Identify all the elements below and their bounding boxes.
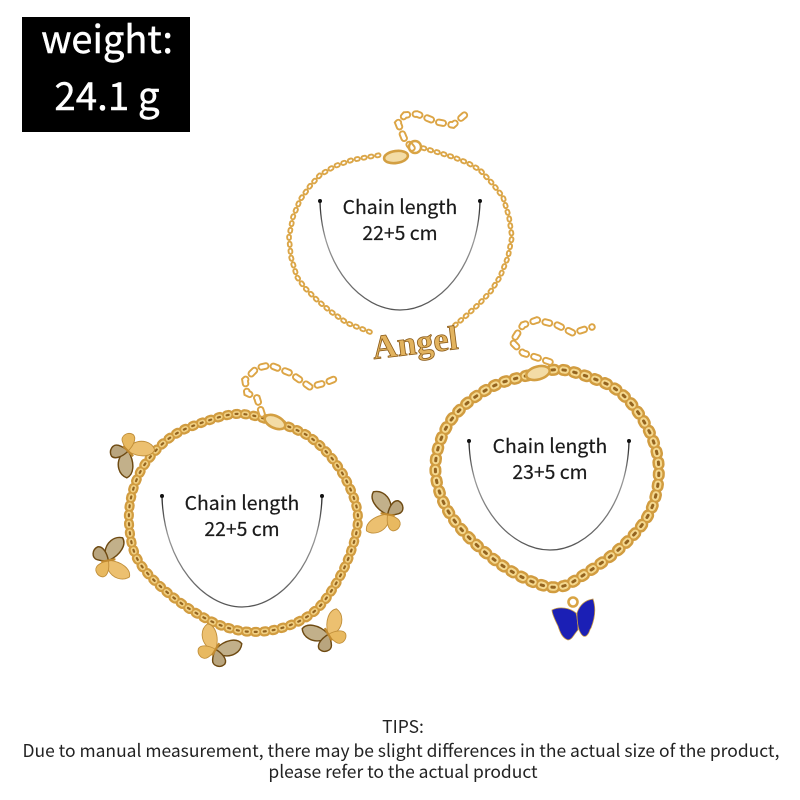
measurement arc: butterfly chain	[160, 494, 324, 607]
weight label: weight:	[41, 9, 173, 64]
tips note: please refer to the actual product	[268, 759, 538, 784]
tips note	[23, 714, 779, 784]
extender chain	[398, 112, 468, 148]
weight label: 24.1 g	[54, 66, 160, 122]
lobster clasp	[383, 141, 421, 165]
weight label	[22, 9, 190, 132]
chain length label: thin chain: Chain length	[343, 191, 457, 220]
Angel nameplate: Angel	[370, 320, 460, 367]
chain length label: blue butterfly chain	[493, 430, 607, 485]
chain length label: butterfly chain: 22+5 cm	[204, 513, 280, 542]
extender chain	[245, 365, 337, 414]
tips note: Due to manual measurement, there may be slight differences in the actual size of the product,	[23, 738, 779, 763]
chain length label: butterfly chain: Chain length	[185, 487, 299, 516]
blue butterfly charm	[552, 598, 595, 640]
bracelet: thin chain with Angel nameplate	[289, 112, 512, 367]
butterfly charm: upper left	[103, 426, 156, 479]
butterfly charm: left	[91, 537, 130, 584]
tips note: TIPS:	[382, 714, 424, 739]
butterfly charm: bottom right	[301, 608, 353, 657]
thin chain	[289, 148, 512, 332]
chain length label: butterfly chain	[185, 487, 299, 542]
bracelet: curb chain with gold butterflies	[129, 365, 358, 632]
extender chain	[512, 320, 592, 362]
bracelet: wide curb chain with blue butterfly	[435, 320, 659, 587]
butterfly charm: right	[366, 491, 405, 538]
curb chain	[435, 370, 659, 587]
lobster clasp	[262, 412, 288, 432]
curb chain	[129, 414, 358, 632]
chain length label: blue butterfly chain: 23+5 cm	[512, 456, 588, 485]
measurement arc: thin chain	[318, 199, 482, 310]
chain length label: thin chain	[343, 191, 457, 246]
chain length label: blue butterfly chain: Chain length	[493, 430, 607, 459]
measurement arc: blue butterfly chain	[467, 439, 631, 550]
butterfly charm: bottom left	[191, 623, 243, 672]
chain length label: thin chain: 22+5 cm	[362, 217, 438, 246]
lobster clasp	[525, 364, 551, 382]
